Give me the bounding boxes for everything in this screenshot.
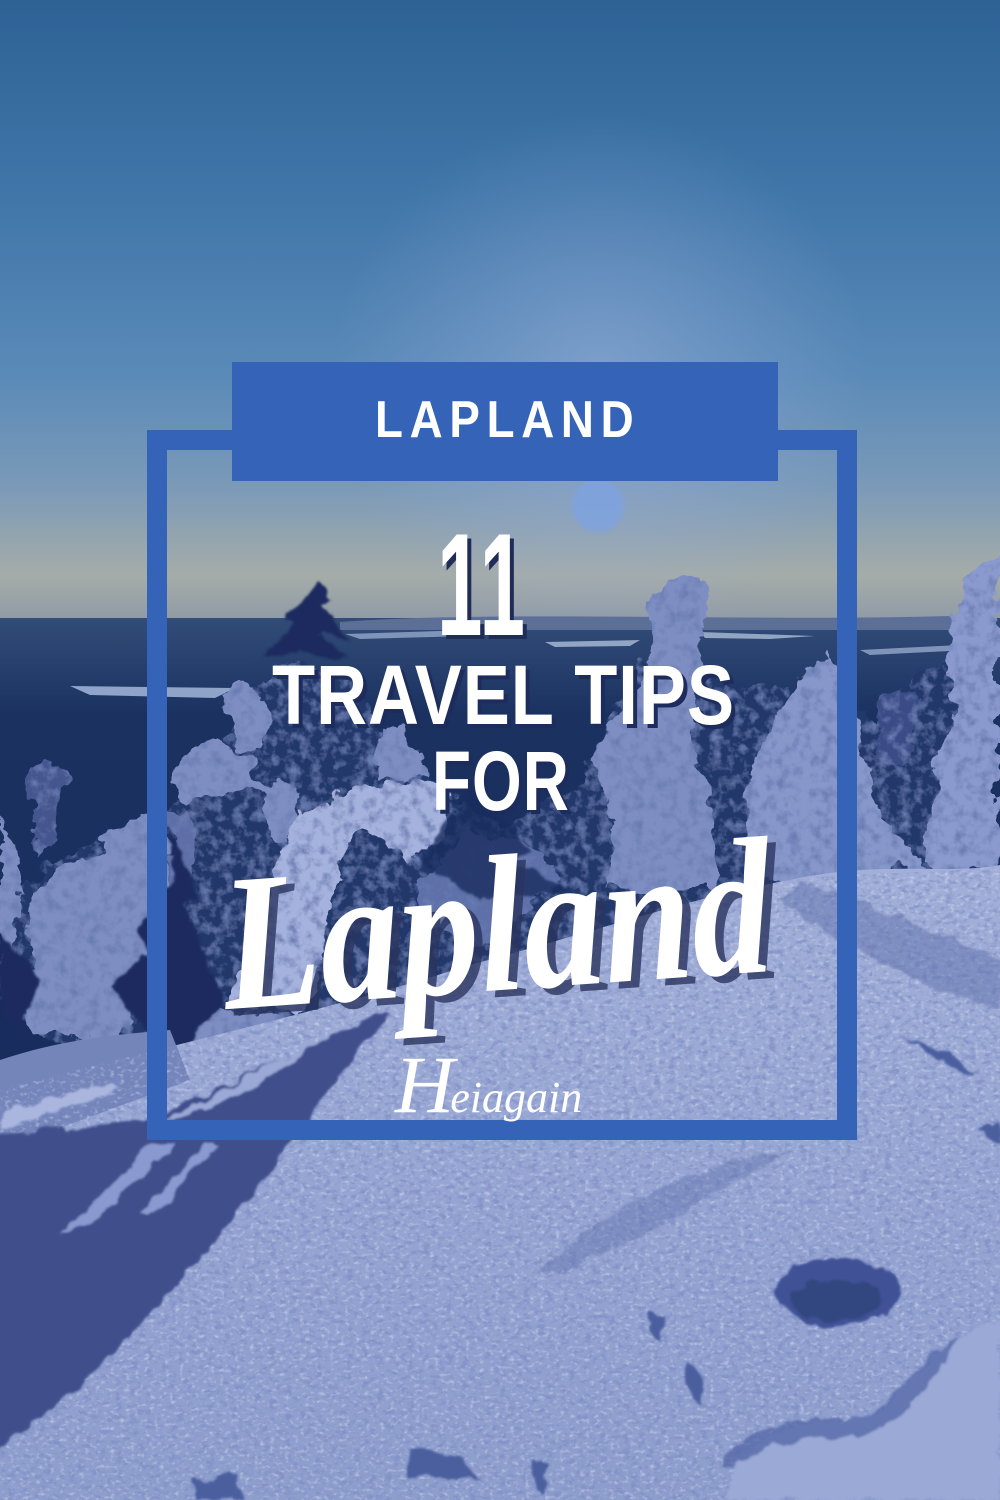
heading: Travel tips: TRAVEL TIPS — [272, 649, 734, 742]
ground left ridge — [0, 1030, 190, 1150]
heading: Lapland script: Lapland — [221, 804, 789, 1059]
distant landscape with lakes — [0, 616, 1000, 1098]
dark conifer silhouettes — [0, 582, 570, 1060]
heading: For: FOR — [432, 733, 569, 828]
snow-covered trees — [0, 560, 1000, 1080]
snow texture — [0, 860, 1000, 1500]
sky — [0, 0, 1000, 625]
heading: Lapland script: Lapland — [213, 798, 780, 1052]
heading: 11: 1 — [480, 504, 525, 667]
heading: For: FOR — [436, 737, 573, 832]
heading: 11 — [437, 504, 529, 671]
sun disc — [572, 480, 624, 532]
snow ground — [0, 865, 1000, 1500]
frame: blue square border — [147, 430, 857, 1140]
banner: Lapland label — [232, 362, 778, 481]
heading: 11: 1 — [437, 504, 482, 667]
long tree shadows — [0, 880, 1000, 1500]
banner text: LAPLAND — [375, 391, 634, 449]
footprint hole — [776, 1258, 900, 1326]
signature: Heiagain: Heiagain — [394, 1039, 582, 1130]
heading: 11: 1 — [484, 508, 529, 671]
heading: 11: 1 — [441, 508, 486, 671]
heading: Travel tips: TRAVEL TIPS — [276, 653, 738, 746]
